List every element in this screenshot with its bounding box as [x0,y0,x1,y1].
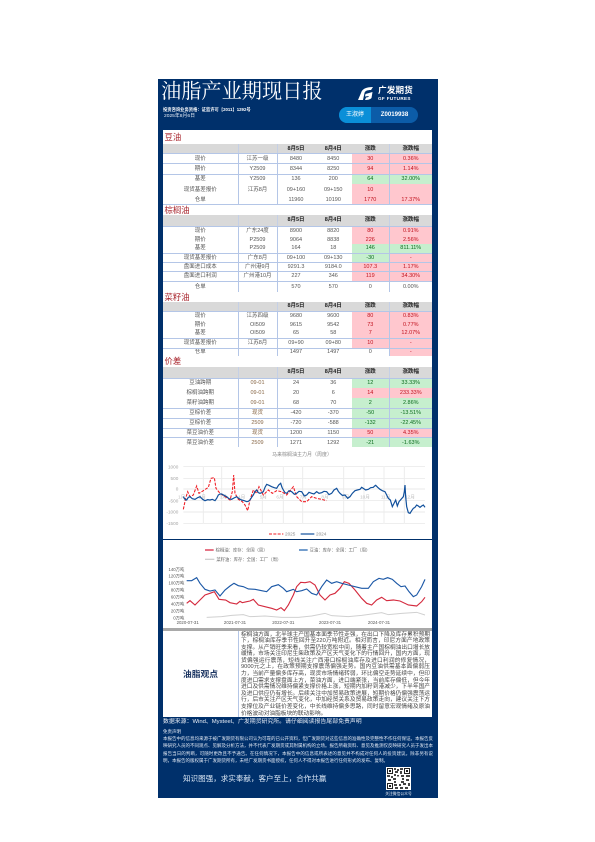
chart panel: Malaysian palm oil line chart [163,447,432,539]
heading: soybean oil: 豆油 [164,132,181,142]
table: spreads: 8月4日 [325,369,342,375]
heading: spreads: 价差 [164,356,181,366]
table: spreads: 36 [330,380,336,386]
table: rapeseed oil: 0.77% [403,322,419,328]
line chart: palm oil, soybean oil and rapeseed oil stocks: 20万吨 [171,607,185,614]
table: rapeseed oil: 58 [330,330,336,336]
table: palm oil: 盘面进口成本 [184,264,217,270]
logo: GF Futures: 广发期货 [378,85,413,95]
table: palm oil: 广州港9月 [245,264,270,270]
table: spreads: -420 [290,410,302,416]
table: rapeseed oil: 0 [369,349,372,355]
logo: GF Futures [358,85,413,100]
table: soybean oil: 0.36% [403,156,419,162]
table: palm oil: 8820 [327,228,339,234]
line chart: 2025 vs 2024: 3月 [220,494,227,500]
table: soybean oil: 8250 [327,166,339,172]
table: spreads: 2509 [251,440,264,446]
table: palm oil: 涨跌幅 [402,217,419,223]
table: soybean oil: 期价 [195,166,206,172]
table: palm oil: P2509 [250,245,265,251]
table: soybean oil: 基差 [195,176,206,182]
heading: rapeseed oil: 菜籽油 [164,292,190,302]
disclaimer: 本报告中的信息均来源于被广发期货有限公司认为可靠的已公开资料，但广发期货对这些信息的准确性及完整性不作任何保证。本报告反映研究人员的不同观点、见解及分析方法，并不代表广发期货或其附属机构的立场。报告所载资料、意见及推测仅反映研究人员于发出本报告当日的判断，可随时更改且不予通告。在任何情况下，本报告中的信息或所表述的意见并不构成对任何人的投资建议。除非另有说明，本报告的版权属于广发期货所有，未经广发期货书面授权，任何人不得对本报告进行任何形式的发布、复制。 [163,736,433,763]
line chart: palm oil, soybean oil and rapeseed oil stocks: 2022-07-31 [272,620,295,625]
table: palm oil: 80 [367,228,373,234]
line chart: 2025 vs 2024: 5月 [260,494,267,500]
panel: oil outlook text: 棕榈油方面，北半球主产国基本面季节性走强，在出口下降及库存累积预期下，棕榈油库存季节性回升至220万吨附近。相对而言，印尼方面产地政策支撑。从产销旺季来看，供需仍较宽松中间，随着主产国棕榈油出口增长放缓情，市场关注印尼生柴政策及产区天气变化下的行情回升，国内方面，现货偏强运行震荡，短线关注广西港口棕榈油库存及进口利润的修复情况，9000元之上，在政策预期支撑震荡偏强走势。国内豆油供需基本面偏弱压力，当前产量偏多库存高，现货市场情绪转弱，环比偏空走势延续中，但印度进口需求支撑盘面上方，菜油方面，进口端紧张，当前库存偏低，但今年进口及供需情况维持偏紧支撑价格上涨，短期内加籽到港减少，下半年国产及进口供应仍有增长。后续关注中加贸易政策进展，短期价格仍偏强震荡运行，后市关注产区天气变化，中加经贸关系及贸易政策走向，建议关注下方支撑位及产业链价差变化，中长线维持偏多思路，同时留意宏观情绪及原油价格波动对油脂板块的联动影响。 [241,632,430,716]
table: palm oil: 9184.0 [325,264,342,270]
heading: spreads [163,356,432,367]
table: spreads: -720 [290,420,302,426]
table: rapeseed oil: 8月4日 [325,303,342,309]
table: rapeseed oil: - [410,340,412,346]
table: rapeseed oil: 9680 [290,313,302,319]
line chart: 2025 vs 2024: 2024 [316,532,327,537]
table: soybean oil: 8月4日 [325,146,342,152]
table: palm oil: 广州港10月 [243,273,272,279]
table: spreads: 2.86% [403,400,419,406]
table: rapeseed oil: 80 [367,313,373,319]
table: rapeseed oil: 基差 [195,330,206,336]
table: palm oil: 146 [366,245,375,251]
line chart: 2025 vs 2024: 1月 [178,494,185,500]
table: spreads: 14 [367,390,373,396]
table: spreads: 09-01 [250,400,265,406]
logo: GF Futures: GF FUTURES [378,96,411,100]
table: spreads: 豆棕价差 [189,410,211,416]
chart panel: inventory line chart [163,540,432,628]
line chart: 2025 vs 2024: -1500 [166,521,179,526]
table: spreads: 33.33% [401,380,420,386]
table: palm oil: 0 [369,284,372,290]
line chart: palm oil, soybean oil and rapeseed oil stocks: 100万吨 [168,579,185,586]
table: rapeseed oil: 江苏四级 [246,313,268,319]
table: soybean oil: 现价 [195,156,206,162]
table: spreads: 24 [293,380,299,386]
table: soybean oil: 09+150 [324,187,342,193]
table: spreads: 1150 [327,430,339,436]
line chart: 2025 vs 2024: 6月 [276,494,284,500]
table: palm oil: 8900 [290,228,302,234]
table: palm oil: P2509 [250,236,265,242]
table: palm oil: 811.11% [400,245,421,251]
table: soybean oil: Y2509 [250,176,265,182]
table: spreads [163,367,432,447]
table: spreads: 09-01 [250,380,265,386]
table: palm oil: 164 [291,245,301,251]
table: palm oil: 广东24度 [246,228,269,234]
table: spreads: -21 [366,440,374,446]
table: rapeseed oil: 09+90 [288,340,304,346]
table: spreads: -50 [366,410,374,416]
table: palm oil: -30 [366,254,374,260]
table: palm oil: 0.00% [403,284,419,290]
disclaimer: 免责声明 [163,728,181,734]
table: soybean oil: 200 [329,176,338,182]
table: palm oil: 346 [329,273,338,279]
table: rapeseed oil: 0.83% [403,313,419,319]
table: palm oil: 18 [330,245,336,251]
table: rapeseed oil: 现价 [195,313,206,319]
table: rapeseed oil: 7 [369,330,372,336]
table: spreads: 6 [332,390,335,396]
line chart: palm oil, soybean oil and rapeseed oil stocks: 60万吨 [171,593,185,600]
table: spreads: 2 [369,400,372,406]
table: spreads: 豆油跨期 [189,380,211,386]
line chart: palm oil, soybean oil and rapeseed oil stocks [168,547,426,625]
table: spreads: -22.45% [400,420,421,426]
line chart: 2025 vs 2024: 10月 [360,494,370,500]
table: palm oil: 0.91% [403,228,419,234]
table: soybean oil: 1770 [364,197,376,203]
divider bar above outlook [163,628,432,631]
heading: palm oil: 棕榈油 [164,205,190,215]
line chart: palm oil, soybean oil and rapeseed oil stocks: 棕榈油：库存：全国（周） [216,547,268,554]
table: palm oil: 09+100 [287,254,305,260]
line chart: 2025 vs 2024: 500 [171,476,179,481]
title: 油脂产业期现日报 [161,81,323,103]
table: spreads: 09-01 [250,390,265,396]
table: soybean oil: Y2509 [250,166,265,172]
table: spreads: 20 [293,390,299,396]
table: palm oil: 107.3 [363,264,377,270]
table: rapeseed oil: 江苏8月 [248,340,267,346]
line chart: 2025 vs 2024: -500 [169,498,179,503]
line chart: 2025 vs 2024: 2025 [285,532,296,537]
table: rapeseed oil: 73 [367,322,373,328]
table: spreads: -132 [365,420,376,426]
table: rapeseed oil: 10 [367,340,373,346]
table: rapeseed oil: 65 [293,330,299,336]
panel: oil outlook label: 油脂观点 [183,669,218,679]
table: spreads: 涨跌幅 [402,369,419,375]
table: spreads: 棕榈油跨期 [186,390,214,396]
line chart: palm oil, soybean oil and rapeseed oil stocks: 2024-07-31 [368,620,391,625]
table: spreads: -1.63% [402,440,419,446]
heading: palm oil [163,205,432,215]
table: rapeseed oil: 涨跌 [365,303,376,309]
line chart: 2025 vs 2024: 1000 [168,464,179,469]
line chart: 2025 vs 2024: 4月 [238,494,245,500]
line chart: palm oil, soybean oil and rapeseed oil stocks: 2020-07-31 [177,620,199,625]
table: rapeseed oil: - [410,349,412,355]
line chart: 2025 vs 2024: 2月 [199,494,206,500]
line chart: palm oil, soybean oil and rapeseed oil stocks: 140万吨 [168,566,185,573]
table: soybean oil: 江苏一级 [246,156,268,162]
line chart: 2025 vs 2024: 0 [176,487,179,492]
table: palm oil: 8838 [327,236,339,242]
table: palm oil: 1.17% [403,264,419,270]
table: palm oil: 8月5日 [287,217,305,223]
table: palm oil: 570 [329,284,338,290]
table: palm oil: 570 [291,284,301,290]
table: rapeseed oil: 1497 [290,349,302,355]
table: spreads: 现货 [252,430,263,436]
table: rapeseed oil: 1497 [327,349,339,355]
table: soybean oil: 涨跌幅 [402,146,419,152]
table: palm oil: 227 [291,273,301,279]
table: spreads: 菜籽油跨期 [186,400,214,406]
panel: oil outlook label [163,631,238,716]
table: soybean oil: 仓单 [195,197,206,203]
table: spreads: -588 [328,420,339,426]
table: spreads: 12 [367,380,373,386]
line chart: 2025 vs 2024: 8月 [321,494,329,500]
table: rapeseed oil: 09+80 [326,340,341,346]
table: palm oil: 期价 [195,236,206,242]
table: soybean oil: 8344 [290,166,302,172]
table: spreads: 1271 [290,440,302,446]
table: spreads: -370 [328,410,339,416]
line chart: 2025 vs 2024: -1000 [166,510,179,515]
table: palm oil: 2.56% [403,236,419,242]
table: palm oil: 盘面进口利润 [184,273,217,279]
table: soybean oil: 1.14% [403,166,419,172]
table: spreads: 豆棕价差 [189,420,211,426]
analyst badge: 王淑婷 [346,112,364,118]
line chart: 2025 vs 2024: 12月 [405,494,415,500]
table: soybean oil: 现货基差报价 [184,187,217,193]
table: palm oil [163,215,432,292]
table: soybean oil: 09+160 [287,187,305,193]
heading: rapeseed oil [163,292,432,302]
table: rapeseed oil: 现货基差报价 [184,340,217,346]
icon: QR code [386,767,411,790]
table: spreads: 233.33% [400,390,422,396]
table: palm oil: 广东8月 [248,254,267,260]
navy report panel [158,79,438,798]
line chart: palm oil, soybean oil and rapeseed oil stocks: 80万吨 [171,587,185,594]
table: soybean oil: 10190 [326,197,341,203]
line chart: palm oil, soybean oil and rapeseed oil stocks: 豆油：库存：全国：工厂（周） [310,547,370,554]
table: spreads: 70 [330,400,336,406]
table: palm oil: 226 [366,236,375,242]
table: palm oil: 现价 [195,228,206,234]
table: rapeseed oil: OI509 [250,322,265,328]
table: soybean oil: 8月5日 [287,146,305,152]
line chart: palm oil, soybean oil and rapeseed oil stocks: 120万吨 [168,573,185,580]
table: soybean oil [163,144,432,205]
table: soybean oil: 10 [367,187,373,193]
table: rapeseed oil: 涨跌幅 [402,303,419,309]
table: soybean oil: 94 [367,166,373,172]
table: palm oil: 119 [366,273,375,279]
table: rapeseed oil: 仓单 [195,349,206,355]
table: spreads: 50 [367,430,373,436]
table: spreads: 68 [293,400,299,406]
table: rapeseed oil: 9600 [327,313,339,319]
table: palm oil: 9064 [290,236,302,242]
table: palm oil: 基差 [195,245,206,251]
table: spreads: -13.51% [400,410,421,416]
table: soybean oil: 8450 [327,156,339,162]
table: rapeseed oil: 8月5日 [287,303,305,309]
data source note: 数据来源：Wind、Mysteel、广发期货研究所。请仔细阅读报告尾部免责声明 [163,718,362,724]
table: palm oil: 现货基差报价 [184,254,217,260]
line chart: palm oil, soybean oil and rapeseed oil stocks: 40万吨 [171,601,185,608]
table: spreads: 菜豆油价差 [186,440,214,446]
heading: soybean oil [163,130,432,144]
slogan: 知识图强，求实奉献，客户至上，合作共赢 [183,774,326,783]
table: rapeseed oil: 期价 [195,322,206,328]
table: palm oil: 09+130 [324,254,342,260]
table: palm oil: 涨跌 [365,217,376,223]
table: spreads: 2509 [251,420,264,426]
line chart: 2025 vs 2024: 11月 [381,494,390,500]
table: rapeseed oil: 9615 [290,322,302,328]
line chart: 2025 vs 2024 [166,464,426,537]
table: soybean oil: 32.00% [401,176,420,182]
table: soybean oil: 136 [291,176,301,182]
table: rapeseed oil [163,302,432,356]
QR caption: 关注微信公众号 [385,792,412,796]
table: rapeseed oil: 9542 [327,322,339,328]
analyst badge [339,107,418,123]
table: soybean oil: 8480 [290,156,302,162]
analyst badge: Z0019938 [381,111,408,118]
line chart: palm oil, soybean oil and rapeseed oil stocks: 菜籽油：库存：全国：工厂（周） [216,556,281,563]
table: soybean oil: 64 [367,176,373,182]
table: soybean oil: 11960 [289,197,303,203]
table: soybean oil: 17.37% [401,197,420,203]
table: spreads: 菜豆油价差 [186,430,214,436]
table: palm oil: 仓单 [195,284,206,290]
line chart: palm oil, soybean oil and rapeseed oil stocks: 2023-07-31 [319,620,342,625]
report date: 2025年8月6日 [164,114,195,119]
table: spreads: 现货 [252,410,263,416]
table: rapeseed oil: 12.07% [401,330,420,336]
table: spreads: 1200 [290,430,302,436]
line chart: 2025 vs 2024: 9月 [342,494,349,500]
line chart: palm oil, soybean oil and rapeseed oil stocks: 2021-07-31 [224,620,247,625]
chart title: 马来棕榈油主力月（周度） [272,452,332,458]
table: rapeseed oil: OI509 [250,330,265,336]
table: soybean oil: 涨跌 [365,146,376,152]
table: spreads: 4.35% [403,430,419,436]
table: spreads: 1292 [327,440,339,446]
table: soybean oil: 江苏8月 [248,187,267,193]
table: spreads: 涨跌 [365,369,376,375]
table: palm oil: - [410,254,412,260]
table: soybean oil: 30 [367,156,373,162]
line chart: 2025 vs 2024: 7月 [300,494,307,500]
qualification subtitle: 投资咨询业务资格：证监许可【2011】1292号 [163,107,251,112]
table: palm oil: 9291.3 [288,264,304,270]
table: palm oil: 34.30% [401,273,420,279]
table: palm oil: 8月4日 [325,217,342,223]
table: spreads: 8月5日 [287,369,305,375]
line chart: palm oil, soybean oil and rapeseed oil stocks: 0万吨 [173,614,185,621]
